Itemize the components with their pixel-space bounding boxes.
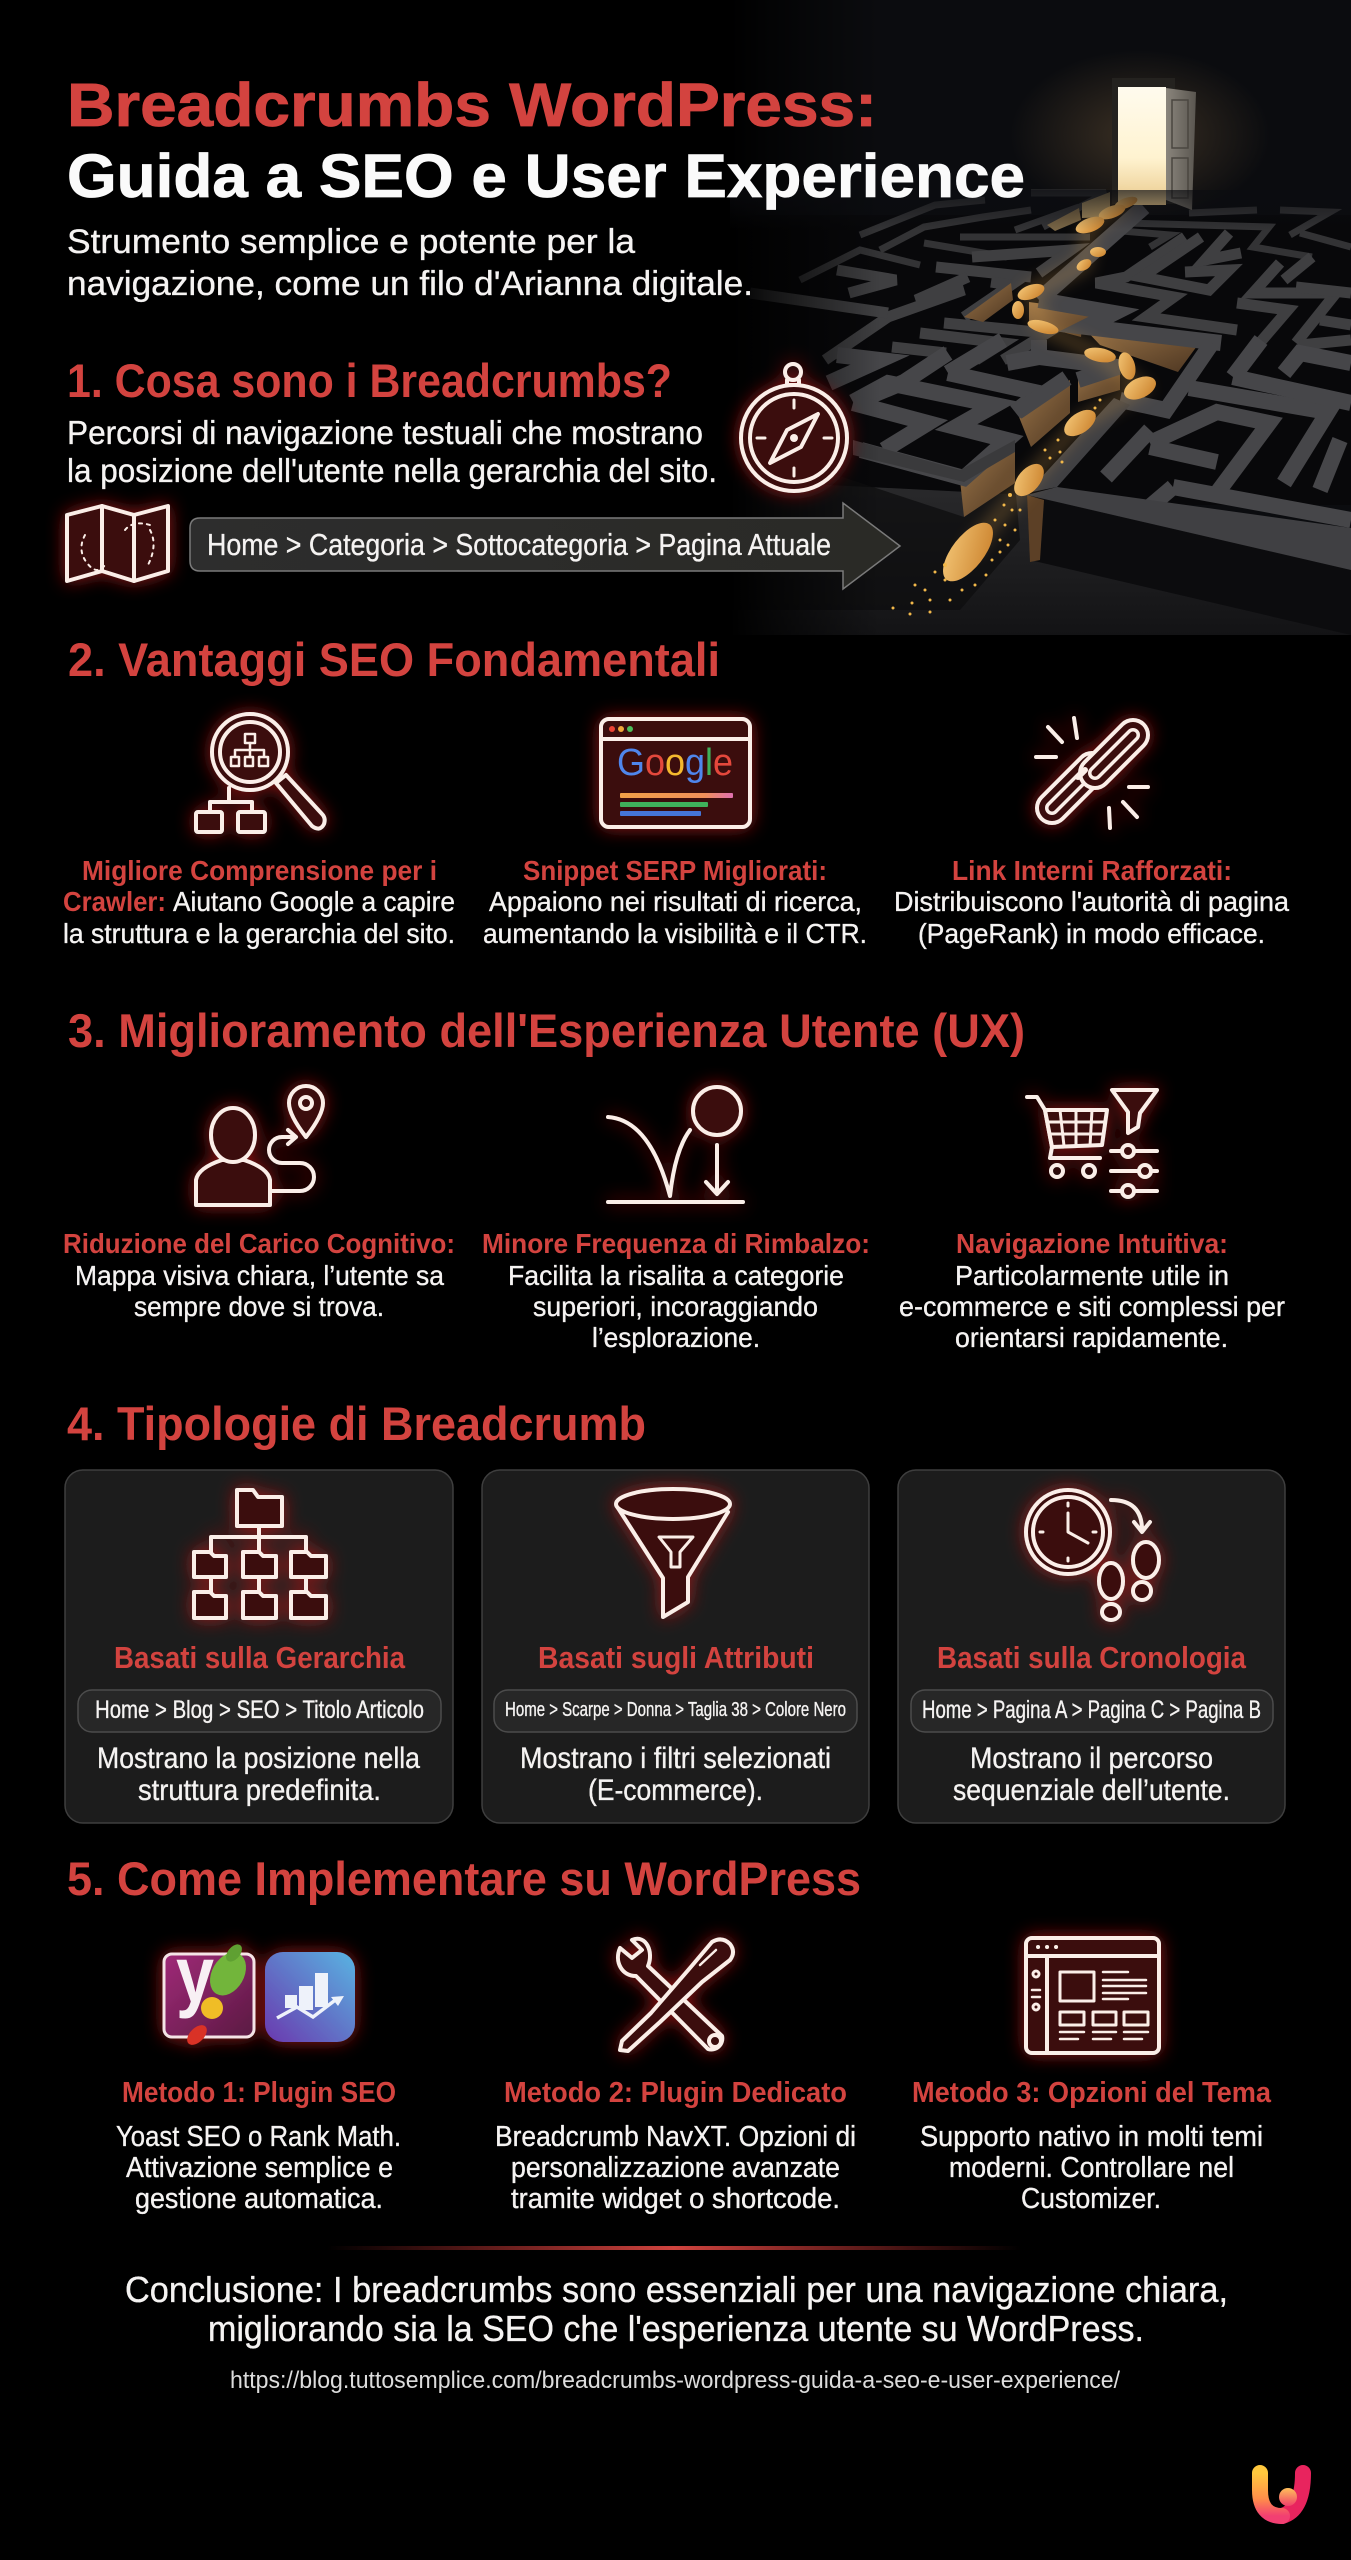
text: intuitive navigation: Particolarmente utile in: [955, 1260, 1229, 1291]
card description: Mostrano la posizione nella: [97, 1742, 420, 1775]
text: method 2: Metodo 2: Plugin Dedicato: [504, 2077, 847, 2109]
text: bounce rate: superiori, incoraggiando: [533, 1291, 818, 1322]
text: method 3: Customizer.: [1021, 2183, 1161, 2215]
conclusion: Conclusione: I breadcrumbs sono essenziali per una navigazione chiara,: [125, 2269, 1228, 2310]
icon: Yoast and Rank Math logos: [164, 1930, 355, 2048]
text: method 3: moderni. Controllare nel: [949, 2152, 1234, 2184]
conclusion: [125, 2269, 1228, 2349]
text: method 1: Yoast SEO o Rank Math.: [116, 2121, 401, 2153]
breadcrumb pill: [78, 1690, 441, 1732]
subtitle: navigazione, come un filo d'Arianna digitale.: [67, 265, 753, 303]
icon: clock and footsteps: [1026, 1490, 1159, 1620]
heading: section 1: 1. Cosa sono i Breadcrumbs?: [67, 354, 672, 407]
text: bounce rate: [482, 1228, 870, 1353]
text: SERP benefit: [483, 855, 867, 949]
icon: funnel: [616, 1489, 730, 1617]
icon: cart, funnel and sliders: [1027, 1090, 1157, 1197]
section 1 description: [67, 414, 717, 489]
text: method 1: [116, 2077, 401, 2215]
text: method 2: personalizzazione avanzate: [511, 2152, 840, 2184]
title: Breadcrumbs WordPress:: [67, 71, 877, 139]
icon: folder tree: [194, 1490, 326, 1618]
breadcrumb arrow: Home > Categoria > Sottocategoria > Pagina Attuale: [207, 527, 831, 562]
heading: section 2: 2. Vantaggi SEO Fondamentali: [68, 633, 720, 686]
brand logo: [1260, 2473, 1303, 2516]
text: crawler benefit: Migliore Comprensione per i: [82, 855, 437, 886]
icon: compass: [741, 364, 847, 491]
maze golden lit wall faces: [960, 192, 1197, 562]
text: bounce rate: Facilita la risalita a categorie: [508, 1260, 844, 1291]
text: method 2: [495, 2077, 856, 2215]
breadcrumb arrow: [190, 503, 900, 589]
maze middle walls: [750, 233, 1351, 360]
text: method 2: tramite widget o shortcode.: [511, 2183, 840, 2215]
text: cognitive load: [63, 1228, 455, 1322]
text: cognitive load: Riduzione del Carico Cognitivo:: [63, 1228, 455, 1259]
section 1 description: la posizione dell'utente nella gerarchia del sito.: [67, 452, 717, 489]
card description: Mostrano i filtri selezionati: [520, 1742, 831, 1775]
icon: wrench and screwdriver: [618, 1939, 733, 2051]
card description: (E-commerce).: [588, 1774, 763, 1807]
text: method 1: Metodo 1: Plugin SEO: [122, 2077, 396, 2109]
subtitle: Strumento semplice e potente per la: [67, 223, 635, 261]
heading: section 5: 5. Come Implementare su WordPress: [67, 1852, 861, 1905]
breadcrumb pill: Home > Scarpe > Donna > Taglia 38 > Colore Nero: [505, 1699, 846, 1721]
card title: Basati sulla Gerarchia: [114, 1640, 406, 1675]
text: bounce rate: Minore Frequenza di Rimbalzo:: [482, 1228, 870, 1259]
icon: theme layout: [1026, 1938, 1159, 2053]
breadcrumb pill: [494, 1690, 857, 1732]
text: cognitive load: sempre dove si trova.: [134, 1291, 384, 1322]
text: internal link benefit: (PageRank) in modo efficace.: [918, 918, 1265, 949]
card description: [97, 1742, 420, 1807]
text: method 1: gestione automatica.: [135, 2183, 383, 2215]
card description: sequenziale dell’utente.: [953, 1774, 1230, 1807]
text: crawler benefit: [63, 855, 455, 949]
card description: [520, 1742, 831, 1807]
card title: Basati sugli Attributi: [538, 1640, 814, 1675]
title: [67, 71, 1025, 210]
icon: person with route: [196, 1086, 323, 1205]
bread trail: [934, 194, 1160, 589]
text: method 3: [912, 2077, 1272, 2215]
maze far walls: [800, 193, 1351, 280]
text: crawler benefit: Aiutano Google a capire: [173, 886, 455, 917]
text: internal link benefit: Link Interni Rafforzati:: [952, 855, 1232, 886]
text: method 3: Metodo 3: Opzioni del Tema: [912, 2077, 1272, 2109]
card title: Basati sulla Cronologia: [937, 1640, 1247, 1675]
text: SERP benefit: Snippet SERP Migliorati:: [523, 855, 827, 886]
text: crawler benefit: la struttura e la gerarchia del sito.: [63, 918, 455, 949]
text: SERP benefit: Appaiono nei risultati di ricerca,: [489, 886, 862, 917]
title: Guida a SEO e User Experience: [67, 142, 1025, 210]
icon: Google SERP window: Google: [617, 742, 733, 784]
text: method 2: Breadcrumb NavXT. Opzioni di: [495, 2121, 856, 2153]
text: intuitive navigation: e-commerce e siti complessi per: [899, 1291, 1285, 1322]
icon: Yoast and Rank Math logos: y: [176, 1930, 214, 2019]
section 1 description: Percorsi di navigazione testuali che mostrano: [67, 414, 703, 451]
panel: attribute breadcrumbs: [482, 1470, 869, 1823]
source url: https://blog.tuttosemplice.com/breadcrumbs-wordpress-guida-a-seo-e-user-experience/: [230, 2367, 1120, 2394]
panel: history breadcrumbs: [898, 1470, 1285, 1823]
heading: section 3: 3. Miglioramento dell'Esperienza Utente (UX): [68, 1004, 1025, 1057]
maze near walls: [829, 207, 1351, 520]
text: internal link benefit: [894, 855, 1289, 949]
card description: [953, 1742, 1230, 1807]
icon: Google SERP window: [601, 719, 750, 827]
text: method 3: Supporto nativo in molti temi: [920, 2121, 1263, 2153]
breadcrumb pill: Home > Blog > SEO > Titolo Articolo: [95, 1696, 424, 1724]
icon: folded map: [67, 506, 168, 581]
text: SERP benefit: aumentando la visibilità e il CTR.: [483, 918, 867, 949]
subtitle: [67, 223, 753, 303]
panel: hierarchy breadcrumbs: [65, 1470, 453, 1823]
text: intuitive navigation: orientarsi rapidamente.: [955, 1322, 1228, 1353]
text: intuitive navigation: Navigazione Intuitiva:: [956, 1228, 1228, 1259]
text: cognitive load: Mappa visiva chiara, l’utente sa: [75, 1260, 444, 1291]
text: bounce rate: l’esplorazione.: [592, 1322, 760, 1353]
conclusion: migliorando sia la SEO che l'esperienza utente su WordPress.: [208, 2308, 1144, 2349]
icon: chain link: [1036, 718, 1148, 828]
door: [1112, 78, 1196, 210]
card description: struttura predefinita.: [138, 1774, 381, 1807]
card description: Mostrano il percorso: [970, 1742, 1213, 1775]
breadcrumb pill: [911, 1690, 1273, 1732]
text: crawler benefit: Crawler:: [63, 886, 166, 917]
text: internal link benefit: Distribuiscono l'autorità di pagina: [894, 886, 1289, 917]
text: method 1: Attivazione semplice e: [126, 2152, 393, 2184]
hero image: dark maze with lit door and bread trail: [730, 0, 1351, 635]
sparkles: [892, 398, 1102, 616]
icon: bouncing ball: [608, 1087, 743, 1202]
icon: magnifier over hierarchy: [196, 714, 325, 832]
text: intuitive navigation: [899, 1228, 1285, 1353]
heading: section 4: 4. Tipologie di Breadcrumb: [67, 1397, 646, 1450]
